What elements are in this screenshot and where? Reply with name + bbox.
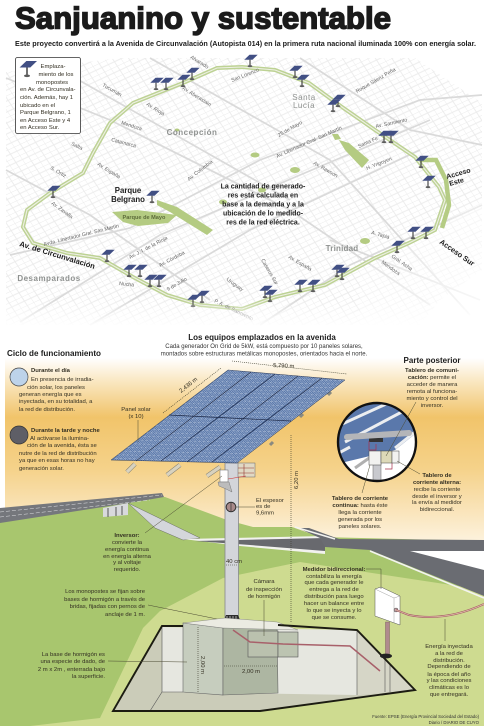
label: energia inyectada: distribución.	[433, 658, 465, 664]
label: energia inyectada: a la red de	[435, 651, 464, 657]
label: monopostes: bridas, fijadas con pernos de	[70, 604, 146, 610]
detail: parte posterior heading: Parte posterior	[404, 356, 460, 365]
legend box	[16, 58, 80, 134]
road labels: Av. Córdoba	[158, 250, 186, 269]
road labels: Av. Zavalla	[50, 201, 74, 220]
road labels: Av. España	[96, 162, 121, 181]
label: base de hormigon: una especie de dado, de	[40, 659, 106, 665]
panel: durante el dia: ción solar, los paneles	[27, 385, 85, 391]
legend box: en Av. de Circunvala-	[20, 87, 75, 93]
district labels: Santa	[292, 93, 316, 102]
label: base de hormigon: 2 m x 2m , enterrada bajo	[38, 667, 106, 673]
label: tablero corriente alterna: corriente alterna:	[413, 480, 461, 486]
label: tablero corriente alterna: Tablero de	[422, 473, 452, 479]
access road labels: Av. de Circunvalación	[18, 239, 96, 271]
label: tablero de comunicacion: remota al funciona-	[407, 389, 457, 395]
panel: durante el dia: En presencia de irradia-	[31, 377, 94, 383]
road labels: Av. Colombia	[187, 159, 214, 183]
legend box: en Acceso Este y 4	[20, 118, 71, 124]
label: inversor: y al voltaje	[113, 560, 142, 566]
dimension: width	[224, 666, 277, 675]
dimension: panel length: 5,790 m	[273, 363, 295, 370]
label: energia inyectada: la época del año	[427, 672, 471, 678]
label: panel solar: (x 10)	[128, 414, 144, 420]
label: espesor	[236, 498, 284, 516]
map center note: La cantidad de generado-	[221, 184, 306, 190]
dimension: width: 2,00 m	[242, 669, 260, 675]
meter box	[375, 587, 484, 658]
road labels: Av. J. I. de la Rioja	[128, 235, 169, 261]
district labels: Concepción	[167, 128, 217, 137]
panel: durante el dia: la red de distribución.	[19, 407, 75, 413]
road labels: A. Tapia	[370, 230, 390, 241]
label: medidor: contabiliza la energía	[306, 574, 363, 580]
label: base de hormigon	[38, 652, 187, 680]
label: inversor: Inversor:	[114, 533, 140, 539]
label: medidor: distribución para luego	[304, 594, 364, 600]
dimension: height: 6,20 m	[294, 471, 300, 489]
road labels: Nucha	[119, 281, 134, 289]
parks	[112, 128, 370, 244]
label: tablero de comunicacion: inversor.	[421, 403, 443, 409]
road labels: H. Yrigoyen	[366, 156, 393, 172]
map center note: ubicación de lo medido-	[223, 210, 304, 218]
label: energia inyectada: climáticas es lo	[429, 685, 470, 691]
inverter and rear boxes	[218, 463, 255, 492]
label: medidor: Medidor bidireccional:	[303, 567, 365, 573]
road labels: Av. Rawson	[312, 161, 339, 179]
label: camara: de hormigón	[248, 594, 280, 600]
label: tablero corriente continua	[332, 465, 389, 530]
district labels: Trinidad	[326, 244, 358, 253]
label: tablero corriente alterna: recibe la corriente	[414, 487, 461, 493]
label: inversor: requerido.	[114, 567, 141, 573]
road labels: Mendoza	[120, 120, 143, 133]
road labels: Roque Sáenz Peña	[355, 67, 397, 95]
road labels: Av. Rioja	[145, 102, 165, 118]
heading: ciclo: Ciclo de funcionamiento	[7, 349, 101, 358]
panel: durante el dia: generan energía que es	[19, 392, 82, 398]
label: tablero de comunicacion: Tablero de comuni-	[405, 368, 459, 374]
solar panel array	[111, 370, 345, 476]
section heading: Los equipos emplazados en la avenida	[188, 333, 336, 342]
road labels	[43, 55, 413, 323]
label: energia inyectada: que entregará.	[430, 692, 469, 698]
pole	[222, 463, 243, 623]
access road labels: Acceso Sur	[438, 237, 476, 268]
section heading	[161, 333, 368, 358]
dimension: panel width: 2,436 m	[179, 377, 199, 395]
label: tablero corriente alterna: desde el inversor y	[412, 494, 462, 500]
monoposte icons on map	[47, 55, 436, 307]
road labels: Caseros Sur	[259, 258, 279, 286]
park labels: Parque	[115, 186, 142, 195]
label: monopostes: Los monopostes se fijan sobre	[65, 589, 146, 595]
label: energia inyectada: y las condiciones	[427, 678, 471, 684]
road labels: Av. Sarmiento	[375, 117, 408, 130]
panel: durante el dia: Durante el día	[31, 368, 71, 374]
panel: durante el dia	[10, 368, 94, 413]
label: espesor: es de	[256, 504, 271, 510]
access road labels: Este	[449, 177, 465, 188]
label: panel solar: Panel solar	[121, 407, 151, 413]
district labels: Lucía	[293, 101, 315, 110]
label: medidor: que se consume.	[312, 615, 357, 621]
dimension: depth	[198, 627, 205, 693]
access road labels	[18, 167, 476, 271]
road labels: Gral. Acha	[390, 254, 413, 273]
label: energia inyectada	[425, 619, 473, 698]
label: monopostes	[64, 589, 222, 620]
label: camara	[246, 579, 282, 636]
label: monopostes: anclaje de 1 m.	[105, 612, 145, 618]
highway	[0, 493, 484, 598]
road labels: Av. España	[287, 255, 313, 273]
road labels: Santa Fe	[357, 136, 379, 150]
label: medidor: que cada generador le	[305, 580, 364, 586]
panel: durante el dia: inyectada, en su totalidad, a	[19, 399, 93, 405]
label: inversor: en energía alterna	[103, 554, 152, 560]
legend box: Parque Belgrano, 1	[20, 110, 71, 116]
label: tablero corriente continua: continua: hasta éste	[332, 503, 388, 509]
road labels: S. Ortiz	[49, 166, 67, 180]
road labels: Av. Aberastain	[181, 86, 212, 108]
label: base de hormigon: La base de hormigón es	[42, 652, 105, 658]
legend box: miento de los	[38, 72, 74, 78]
label: medidor	[303, 567, 381, 621]
label: inversor: energía continua	[105, 547, 150, 553]
access road labels: Acceso	[446, 167, 471, 181]
label: tablero corriente continua: paneles solares.	[339, 524, 382, 530]
label: camara: de inspección	[246, 587, 282, 593]
road labels: P. A. de Sarmiento	[213, 298, 254, 323]
label: tablero corriente alterna	[397, 461, 462, 513]
dimension: depth: 2,00 m	[199, 656, 205, 674]
map center note: res de la red eléctrica.	[226, 220, 300, 226]
source credit	[372, 714, 480, 725]
pole section icon	[226, 502, 236, 512]
label: medidor: lo que se inyecta y lo	[306, 608, 362, 614]
panel: durante la noche: ción de la avenida, ésta se	[27, 443, 97, 449]
detail circle	[335, 400, 420, 485]
label: tablero corriente alterna: la envía al medidor	[412, 500, 462, 506]
legend box: ción. Además, hay 1	[20, 95, 73, 101]
label: energia inyectada: Energía inyectada	[425, 644, 473, 650]
legend box: monopostes	[36, 80, 68, 86]
label: tablero corriente continua: Tablero de corriente	[332, 496, 389, 502]
label: espesor: El espesor	[256, 498, 284, 504]
panel: durante la noche: generación solar.	[19, 466, 64, 472]
title: Sanjuanino y sustentable	[15, 0, 391, 36]
label: tablero de comunicacion: cación: permite el	[408, 375, 456, 381]
label: base de hormigon: la superficie.	[72, 674, 105, 680]
label: espesor: 9,6mm	[256, 510, 274, 516]
road labels: Avda. Libertador Gral. San Martín	[43, 223, 120, 248]
section heading: montados sobre estructuras metálicas monopostes, orientados hacia el norte.	[161, 352, 368, 358]
road labels: Tucumán	[101, 83, 123, 99]
map center note: base a la demanda y a la	[222, 202, 304, 208]
road labels: Catamarca	[110, 137, 137, 150]
label: tablero corriente continua: generada por los	[338, 517, 382, 523]
map center note: res está calculada en	[228, 192, 298, 200]
panel: durante la noche: Al activarse la ilumina-	[30, 436, 89, 442]
road labels: 25 de Mayo	[277, 120, 304, 139]
panel: city map	[0, 55, 484, 328]
sky background	[5, 358, 484, 543]
label: tablero de comunicacion: acceder de manera	[407, 382, 458, 388]
road labels: Alvarado	[189, 55, 210, 71]
panel: durante la noche: ya que en esas horas no hay	[19, 458, 95, 464]
label: panel solar	[121, 407, 151, 442]
section heading: Cada generador On Grid de 5kW, está compuesto por 10 paneles solares,	[165, 344, 363, 350]
map center note	[221, 184, 306, 226]
label: tablero corriente alterna: bidireccional.	[420, 507, 455, 513]
label: inversor	[103, 476, 222, 573]
label: tablero de comunicacion: miento y control del	[406, 396, 458, 402]
label: medidor: hacer un balance entre	[304, 601, 365, 607]
label: tablero corriente continua: llega la corriente	[338, 510, 382, 516]
foundation pit	[113, 618, 415, 711]
district labels	[17, 93, 358, 283]
road labels: Av. Libertador Gral. San Martín	[275, 125, 343, 160]
park labels: Belgrano	[111, 195, 145, 204]
ground	[0, 497, 484, 726]
road labels: Salta	[70, 141, 84, 152]
label: energia inyectada: Dependiendo de	[427, 664, 471, 670]
label: camara: Cámara	[254, 579, 275, 585]
dimension: panel length	[232, 361, 347, 374]
source credit: Fuente: EPSE (Energía Provincial Sociedad del Estado)	[372, 714, 480, 719]
legend box: en Acceso Sur.	[20, 125, 60, 131]
dimension: pole diameter: 40 cm	[226, 559, 242, 565]
label: tablero de comunicacion	[386, 368, 459, 456]
label: monopostes: bases de hormigón a través de	[64, 597, 146, 603]
road labels: San Lorenzo	[231, 67, 260, 84]
ring road	[23, 67, 449, 309]
subtitle: Este proyecto convertirá a la Avenida de Circunvalación (Autopista 014) en la primera ruta nacional iluminada 100% con energía solar.	[15, 39, 476, 48]
panel: durante la noche	[10, 426, 100, 472]
road labels: Uruguay	[225, 277, 245, 293]
panel: durante la noche: nutre de la red de distribución	[19, 451, 97, 457]
dimension: panel width	[163, 368, 221, 413]
district labels: Desamparados	[17, 274, 81, 283]
road labels: 9 de Julio	[166, 276, 188, 293]
source credit: Diario / DIARIO DE CUYO	[429, 720, 480, 725]
road labels: Mendoza	[380, 260, 401, 277]
label: inversor: convierte la	[112, 540, 143, 546]
panel: durante la noche: Durante la tarde y noche	[31, 428, 100, 434]
park labels: Parque de Mayo	[123, 215, 166, 221]
label: medidor: entrega a la red de	[309, 587, 359, 593]
legend box: Emplaza-	[41, 64, 65, 70]
park labels	[111, 186, 166, 221]
legend box: ubicado en el	[20, 103, 55, 109]
